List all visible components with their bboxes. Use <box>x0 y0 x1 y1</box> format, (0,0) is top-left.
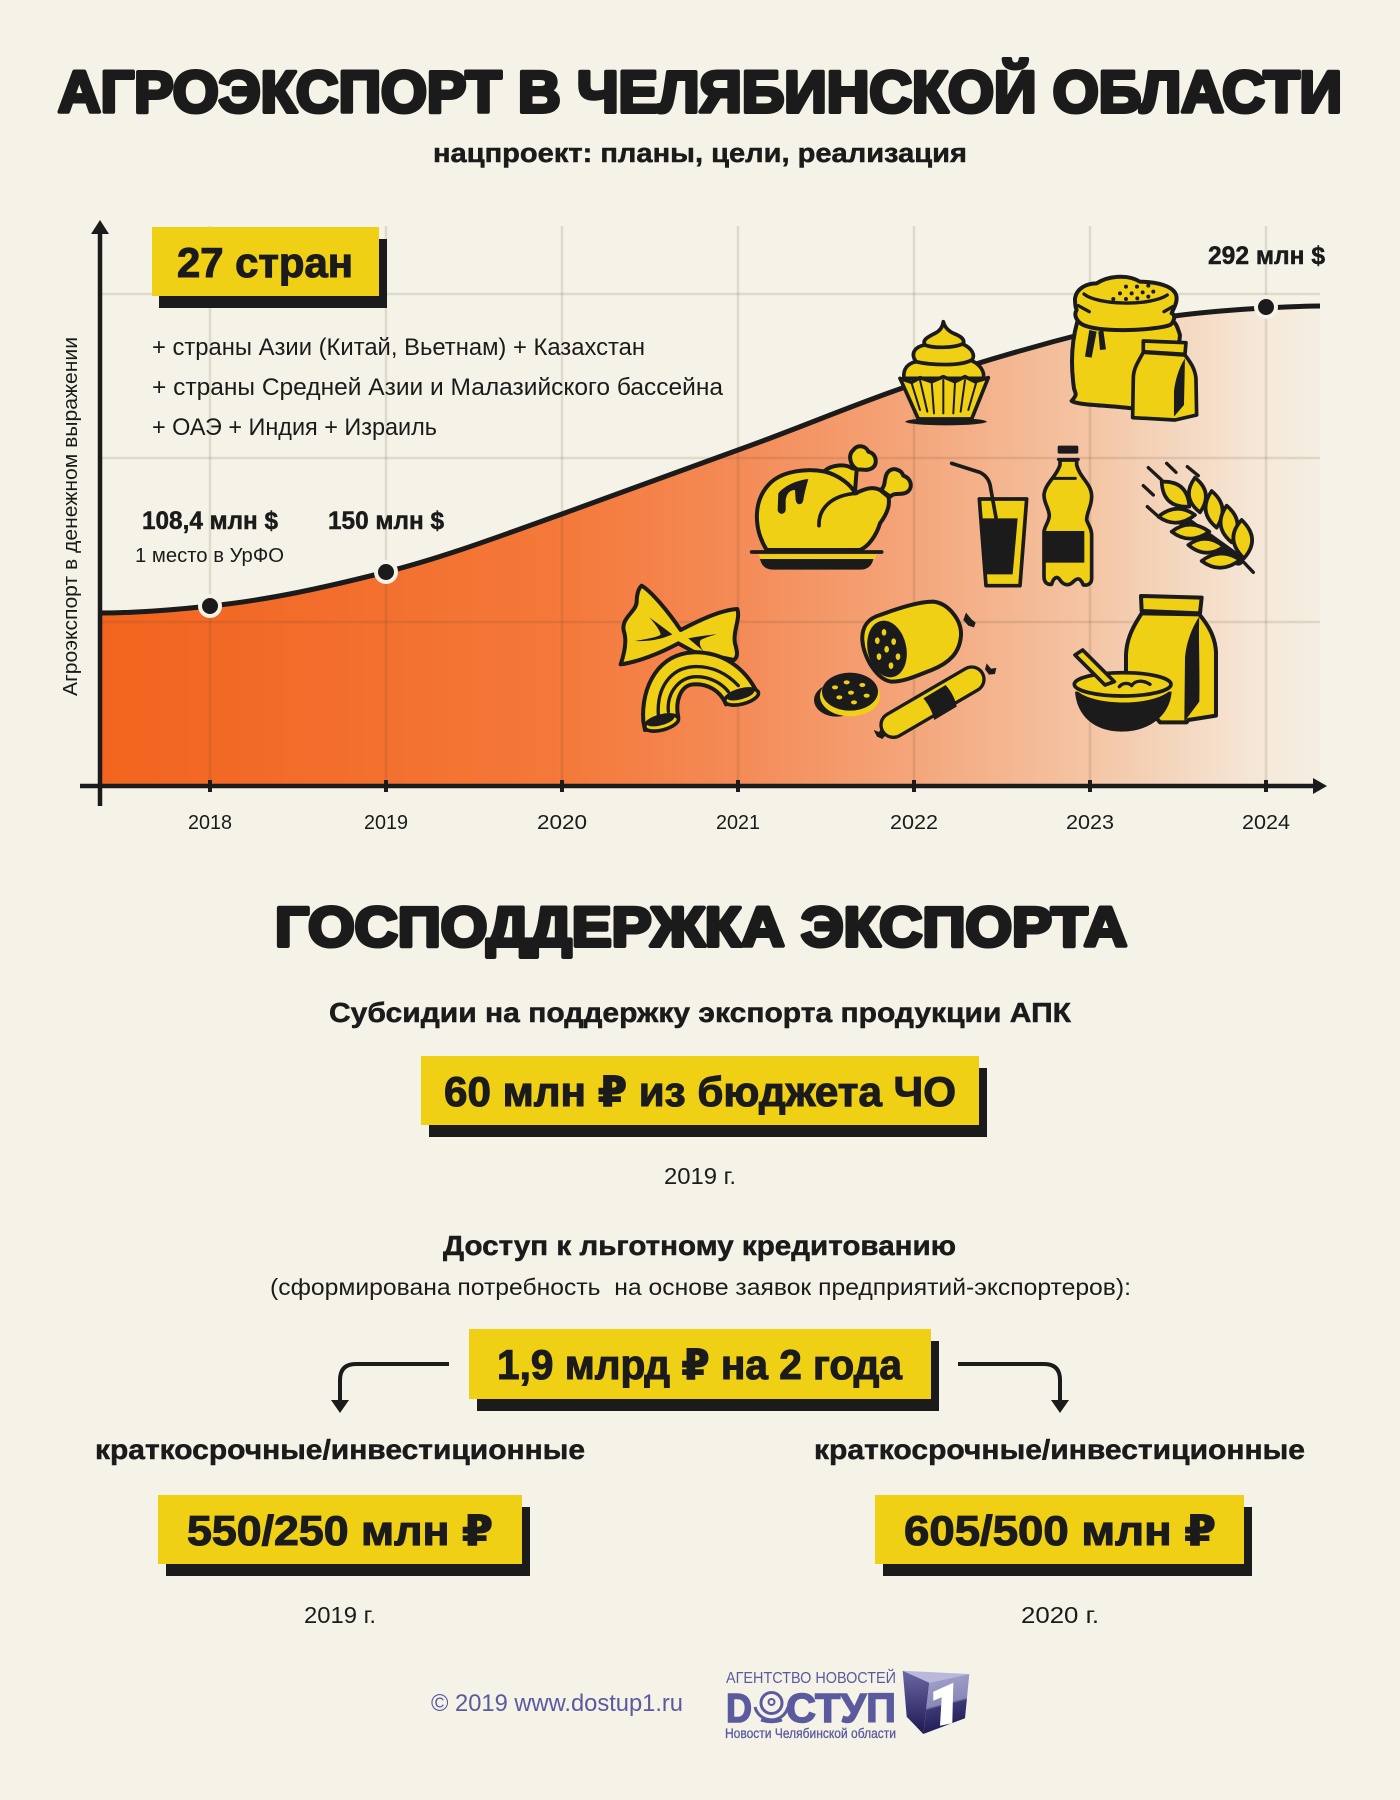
data points <box>200 297 1276 616</box>
icon: glass with straw <box>952 463 1027 586</box>
country list: + страны Азии (Китай, Вьетнам) + Казахстан <box>152 334 645 361</box>
callout: 27 countries: 27 стран <box>177 239 353 286</box>
icon: roast chicken <box>752 446 911 570</box>
value 2018: 1 место в УрФО <box>135 545 284 567</box>
icon: bottle <box>1044 446 1092 585</box>
x axis years: 2021 <box>716 812 760 834</box>
x axis years: 2022 <box>890 812 938 834</box>
note: (сформирована потребность на основе заявок предприятий-экспортеров): <box>270 1274 1131 1300</box>
arrow right <box>958 1364 1069 1413</box>
logo: СТУП <box>786 1685 896 1731</box>
x axis years: 2019 <box>364 812 408 834</box>
x axis years: 2023 <box>1066 812 1114 834</box>
country list: + страны Средней Азии и Малазийского бассейна <box>152 374 724 401</box>
value 2024: 292 млн $ <box>1208 242 1325 270</box>
icon: cupcake <box>900 322 988 425</box>
icon: cereal bowl and package <box>1074 596 1216 732</box>
right branch label: краткосрочные/инвестиционные <box>814 1434 1305 1465</box>
icon: farfalle and macaroni <box>621 586 760 734</box>
logo: Новости Челябинской области <box>725 1725 896 1741</box>
callout: 60 million <box>421 1056 987 1137</box>
callout: 60 million: 60 млн ₽ из бюджета ЧО <box>444 1068 956 1115</box>
x axis years: 2024 <box>1242 812 1290 834</box>
icon: sack and package <box>1072 277 1197 420</box>
logo: D <box>726 1685 752 1731</box>
subtitle: нацпроект: планы, цели, реализация <box>433 138 967 168</box>
callout: 550/250: 550/250 млн ₽ <box>187 1507 493 1554</box>
section heading: state support: ГОСПОДДЕРЖКА ЭКСПОРТА <box>275 895 1127 958</box>
area fill <box>100 306 1320 786</box>
year right: 2020 г. <box>1021 1602 1099 1628</box>
icon: sausages <box>814 602 996 739</box>
panel: area chart of agro-export <box>60 220 1327 834</box>
x axis years <box>188 812 1290 834</box>
y axis label: Агроэкспорт в денежном выражении <box>60 337 82 696</box>
country list <box>152 334 724 441</box>
callout: 27 countries <box>152 227 387 308</box>
callout: 1.9 billion <box>469 1329 939 1411</box>
country list: + ОАЭ + Индия + Израиль <box>152 414 437 441</box>
x axis years: 2018 <box>188 812 232 834</box>
left branch label: краткосрочные/инвестиционные <box>95 1434 585 1465</box>
grid <box>100 226 1320 786</box>
copyright: © 2019 www.dostup1.ru <box>431 1690 683 1717</box>
growth curve <box>100 306 1320 613</box>
value 2018 <box>135 507 284 567</box>
year left: 2019 г. <box>304 1602 376 1628</box>
year 2019: 2019 г. <box>664 1163 736 1189</box>
callout: 605/500 <box>875 1495 1252 1576</box>
subheading: subsidies: Субсидии на поддержку экспорта продукции АПК <box>329 997 1072 1028</box>
logo: АГЕНТСТВО НОВОСТЕЙ <box>726 1668 896 1687</box>
callout: 550/250 <box>158 1495 530 1576</box>
x axis years: 2020 <box>537 812 587 834</box>
axes <box>80 220 1327 806</box>
value 2018: 108,4 млн $ <box>142 507 278 535</box>
title: АГРОЭКСПОРТ В ЧЕЛЯБИНСКОЙ ОБЛАСТИ <box>58 60 1342 125</box>
subheading: preferential credit: Доступ к льготному кредитованию <box>443 1230 956 1261</box>
value 2019: 150 млн $ <box>328 507 444 535</box>
icon: wheat ear <box>1143 463 1253 572</box>
arrow left <box>331 1364 449 1413</box>
callout: 1.9 billion: 1,9 млрд ₽ на 2 года <box>497 1341 903 1388</box>
callout: 605/500: 605/500 млн ₽ <box>904 1507 1216 1554</box>
logo <box>725 1668 969 1741</box>
